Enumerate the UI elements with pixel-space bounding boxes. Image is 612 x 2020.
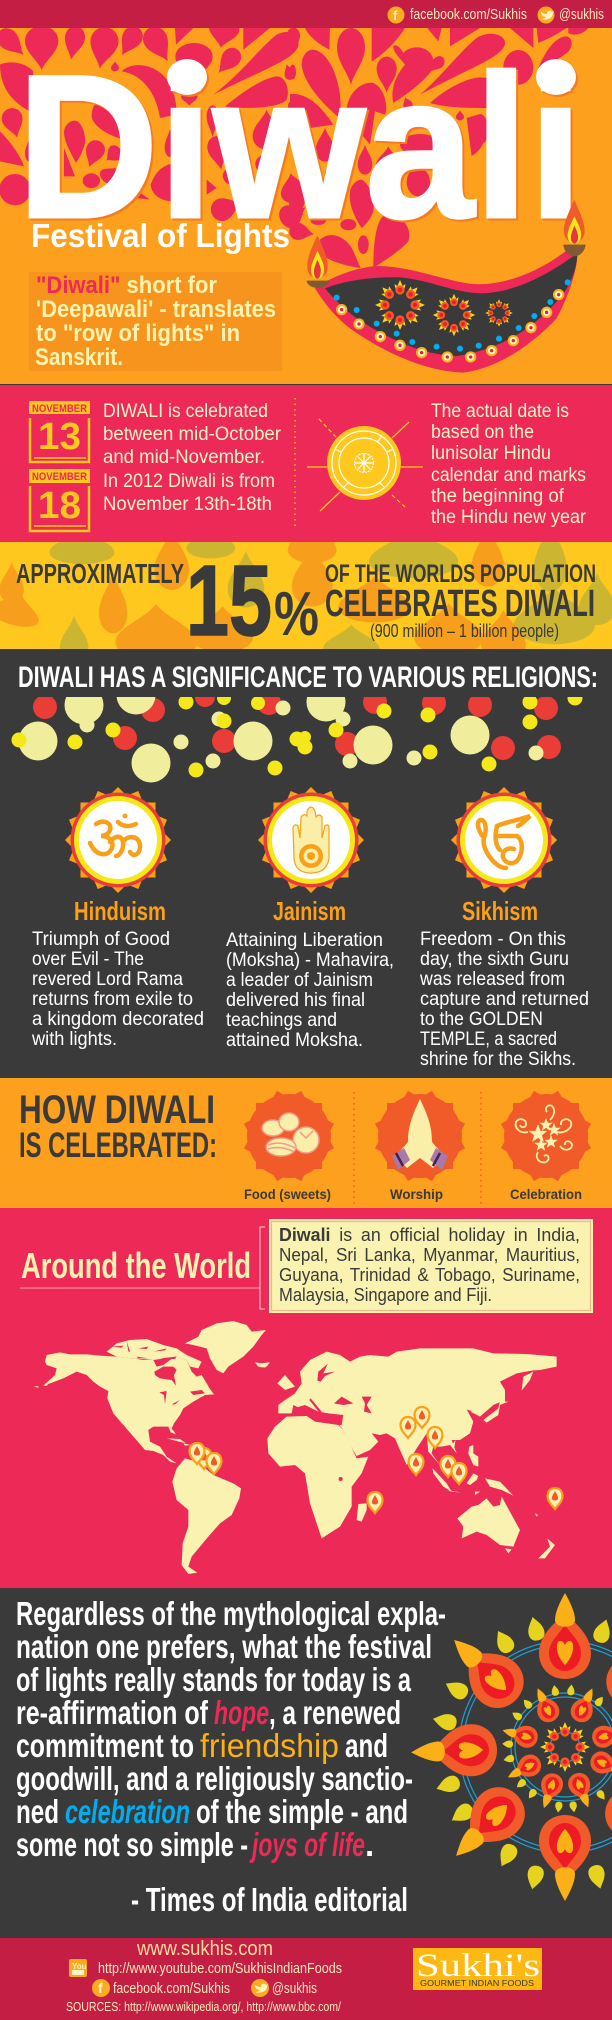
- icon: calendar November 18: [29, 469, 90, 531]
- quote text: joys of life: [249, 1826, 365, 1863]
- column: Hinduism: revered Lord Rama: [32, 969, 183, 990]
- column: Jainism: (Moksha) - Mahavira,: [226, 950, 394, 971]
- text block: meaning of Diwali: Sanskrit.: [35, 344, 123, 371]
- facebook link text: facebook.com/Sukhis: [410, 6, 527, 23]
- column: Jainism: Jainism: [273, 896, 346, 926]
- icon: twitter footer: [251, 1979, 269, 1997]
- quote text: Regardless of the mythological expla-: [16, 1595, 446, 1632]
- text block: when Diwali is celebrated: [103, 401, 282, 515]
- text block: lunisolar calendar: The actual date is: [431, 401, 569, 422]
- text block: when Diwali is celebrated: and mid-November.: [103, 447, 265, 468]
- sources: SOURCES: http://www.wikipedia.org/, http://www.bbc.com/: [66, 2000, 341, 2014]
- column: Sikhism: [419, 896, 589, 1070]
- text block: when Diwali is celebrated: In 2012 Diwali is from: [103, 471, 275, 492]
- callout: official holiday: Diwali is an official holiday in India,: [279, 1224, 580, 1245]
- stat: approximately: APPROXIMATELY: [16, 558, 184, 589]
- icon: diya lamp: [307, 200, 586, 373]
- icon: calendar November 13: NOVEMBER: [32, 403, 87, 415]
- panel: around the world: [0, 1208, 612, 1588]
- quote text: celebration: [65, 1793, 190, 1830]
- twitter footer handle: @sukhis: [272, 1980, 317, 1997]
- icon: youtube: [69, 1959, 87, 1977]
- heading: HOW DIWALI: [19, 1088, 215, 1132]
- labels: Worship: [390, 1186, 443, 1202]
- column: Sikhism: Freedom - On this: [420, 929, 566, 950]
- text block: meaning of Diwali: 'Deepawali' - translates: [36, 296, 276, 323]
- column: Hinduism: a kingdom decorated: [32, 1009, 204, 1030]
- callout: official holiday: Malaysia, Singapore and Fiji.: [279, 1284, 492, 1305]
- logo: Sukhi's: [413, 1948, 542, 1990]
- column: Jainism: teachings and: [226, 1010, 337, 1031]
- panel: religions: [12, 666, 596, 1065]
- icon: twitter: [538, 6, 554, 24]
- text block: meaning of Diwali: to "row of lights" in: [36, 320, 240, 347]
- heading: [19, 1088, 217, 1165]
- icon: calendar November 18: NOVEMBER: [32, 471, 87, 483]
- column: Sikhism: TEMPLE, a sacred: [420, 1029, 557, 1050]
- decorative lights: [12, 697, 582, 782]
- quote text: re-affirmation of: [16, 1694, 209, 1731]
- text block: lunisolar calendar: [431, 401, 587, 528]
- icon: food sweets: [244, 1091, 334, 1181]
- emblem: Jain hand: [258, 787, 364, 893]
- column: Hinduism: [31, 896, 204, 1050]
- labels: [244, 1186, 582, 1202]
- pins: [190, 1407, 562, 1513]
- stat caption: [325, 560, 596, 641]
- website: www.sukhis.com: [136, 1938, 273, 1960]
- text block: lunisolar calendar: the beginning of: [431, 486, 565, 507]
- labels: Food (sweets): [244, 1186, 331, 1202]
- column: Sikhism: day, the sixth Guru: [420, 949, 569, 970]
- stat: 15%: 15: [186, 545, 272, 657]
- panel: social header bar: [0, 0, 612, 28]
- column: Sikhism: capture and returned: [420, 989, 589, 1010]
- quote text: ned: [16, 1793, 59, 1830]
- emblem: Om: [65, 787, 171, 893]
- labels: Celebration: [510, 1186, 582, 1202]
- quote text: and: [345, 1727, 388, 1764]
- logo: Sukhi's: Sukhi's: [416, 1948, 540, 1984]
- column: Hinduism: with lights.: [31, 1029, 117, 1050]
- heading: Around the World: [21, 1245, 251, 1286]
- column: Jainism: a leader of Jainism: [226, 970, 373, 991]
- icon: youtube: You: [72, 1962, 87, 1971]
- column: Sikhism: Sikhism: [462, 896, 538, 926]
- quote text: commitment to: [16, 1727, 194, 1764]
- quote text: some not so simple -: [16, 1826, 248, 1863]
- heading: [20, 1227, 265, 1309]
- text block: when Diwali is celebrated: November 13th-18th: [103, 494, 272, 515]
- icon: facebook footer: f: [98, 1980, 103, 1996]
- world map: [33, 1321, 562, 1574]
- text block: meaning of Diwali: [29, 272, 282, 371]
- icon: calendar November 13: [29, 401, 90, 462]
- stat caption: (900 million – 1 billion people): [370, 621, 559, 641]
- quote text: hope: [214, 1694, 269, 1731]
- quote text: nation one prefers, what the festival: [16, 1628, 432, 1665]
- quote text: friendship: [200, 1727, 339, 1764]
- panel: hero: [0, 16, 612, 384]
- facebook footer link: facebook.com/Sukhis: [113, 1980, 230, 1997]
- panel: quote: [0, 1588, 612, 1938]
- text block: lunisolar calendar: based on the: [431, 422, 534, 443]
- icon: facebook footer: [92, 1979, 110, 1997]
- quote text: [16, 1595, 446, 1863]
- logo: Sukhi's: GOURMET INDIAN FOODS: [420, 1978, 534, 1988]
- callout: official holiday: [269, 1219, 593, 1313]
- callout: official holiday: Guyana, Trinidad & Tobago, Suriname,: [279, 1264, 580, 1285]
- callout: official holiday: Nepal, Sri Lanka, Myanmar, Mauritius,: [279, 1244, 580, 1265]
- text block: when Diwali is celebrated: between mid-October: [103, 424, 282, 445]
- column: Hinduism: over Evil - The: [32, 949, 144, 970]
- column: Hinduism: Hinduism: [74, 896, 166, 926]
- column: Jainism: [226, 896, 394, 1051]
- quote attribution: - Times of India editorial: [131, 1881, 408, 1918]
- column: Jainism: delivered his final: [226, 990, 365, 1011]
- icon: calendar November 13: 13: [38, 416, 81, 458]
- quote text: of lights really stands for today is a: [16, 1661, 411, 1698]
- emblem: Ek Onkar: [451, 787, 557, 893]
- heading: IS CELEBRATED:: [19, 1126, 217, 1165]
- youtube link: http://www.youtube.com/SukhisIndianFoods: [98, 1960, 342, 1977]
- column: Sikhism: was released from: [419, 969, 565, 990]
- quote text: .: [365, 1826, 374, 1863]
- decorative petal pattern: [0, 16, 588, 268]
- panel: dates: [0, 385, 612, 542]
- mandala: [410, 1593, 612, 1901]
- quote text: , a renewed: [269, 1694, 401, 1731]
- panel: population statistic: [0, 519, 612, 662]
- quote text: goodwill, and a religiously sanctio-: [16, 1760, 413, 1797]
- icon: calendar November 18: 18: [38, 485, 81, 527]
- title: Diwali: [19, 35, 585, 263]
- panel: how Diwali is celebrated: [0, 1078, 612, 1208]
- column: Hinduism: returns from exile to: [32, 989, 193, 1010]
- quote text: of the simple - and: [196, 1793, 408, 1830]
- column: Sikhism: shrine for the Sikhs.: [420, 1049, 576, 1070]
- icon: facebook: f: [393, 8, 398, 23]
- icon: sun: [307, 419, 423, 511]
- icon: facebook: [388, 6, 404, 24]
- text block: lunisolar calendar: calendar and marks: [431, 465, 586, 486]
- text block: when Diwali is celebrated: DIWALI is celebrated: [103, 401, 268, 422]
- icon: celebration stars: [501, 1091, 591, 1181]
- title: Diwali: [17, 33, 583, 261]
- icon: worship hands: [375, 1091, 465, 1181]
- text block: lunisolar calendar: the Hindu new year: [431, 507, 587, 528]
- panel: footer: [0, 1938, 612, 2020]
- column: Jainism: Attaining Liberation: [226, 930, 383, 951]
- column: Sikhism: to the GOLDEN: [420, 1009, 543, 1030]
- text block: meaning of Diwali: "Diwali" short for: [36, 272, 217, 299]
- stat: 15%: %: [274, 580, 319, 649]
- column: Hinduism: Triumph of Good: [32, 929, 170, 950]
- text block: lunisolar calendar: lunisolar Hindu: [431, 443, 551, 464]
- column: Jainism: attained Moksha.: [226, 1030, 363, 1051]
- subtitle: Festival of Lights: [31, 217, 290, 254]
